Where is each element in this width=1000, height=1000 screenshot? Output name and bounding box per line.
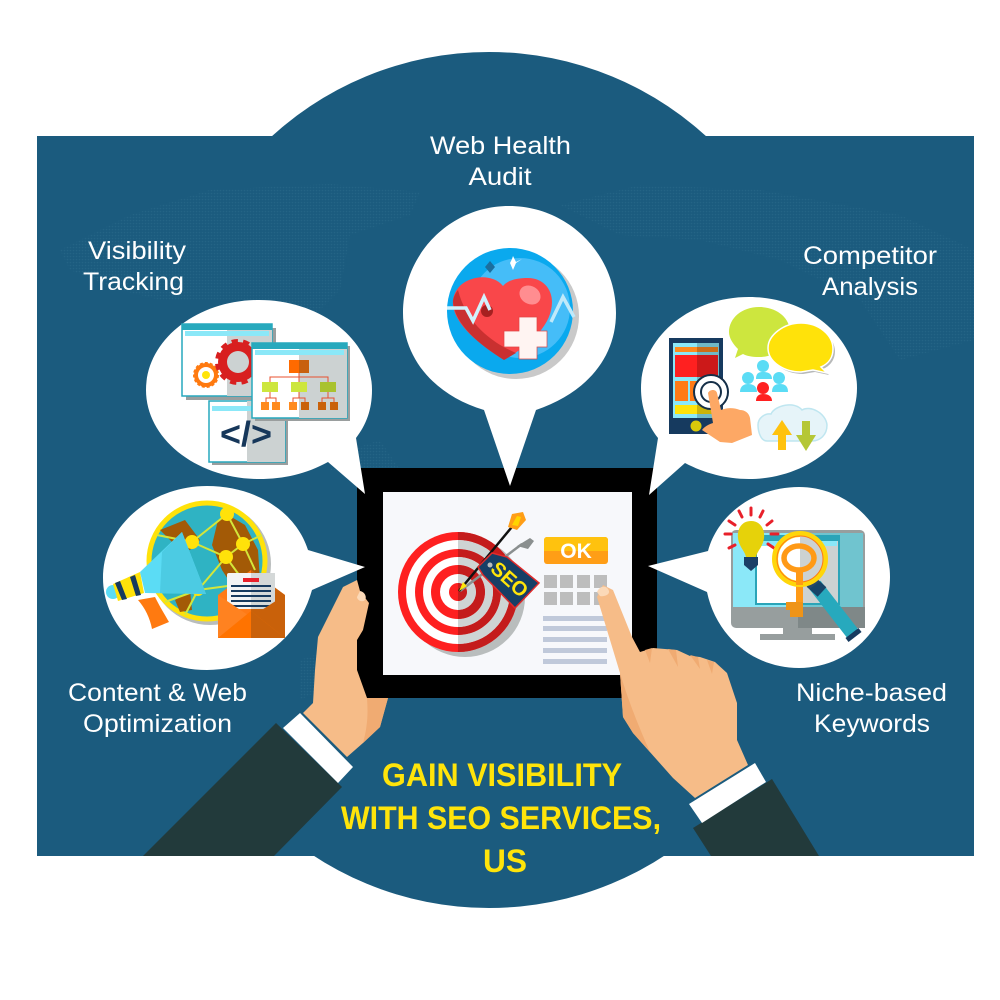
tablet body <box>357 468 657 698</box>
faint dotted world map <box>60 184 974 700</box>
speech bubble: competitor analysis <box>641 297 857 495</box>
label: competitor analysis: Competitor <box>803 242 937 270</box>
keypad squares <box>544 575 607 605</box>
left hand <box>303 580 388 757</box>
label: visibility tracking: Visibility <box>88 237 187 265</box>
window with code symbol <box>209 401 288 465</box>
key <box>786 570 803 617</box>
cloud with arrows <box>758 405 827 451</box>
title <box>341 757 661 879</box>
green speech balloon <box>729 307 790 358</box>
icon: niche keywords <box>725 508 865 640</box>
icon: heart health <box>447 248 579 379</box>
right shirt cuff <box>689 763 766 823</box>
people group <box>740 360 788 401</box>
yellow dart <box>459 512 526 591</box>
label: competitor analysis <box>803 242 937 301</box>
OK button: OK <box>560 540 592 563</box>
text lines on screen <box>543 616 607 664</box>
pointing hand <box>702 390 752 443</box>
monitor <box>731 530 865 640</box>
grey dart <box>460 538 534 591</box>
icon: competitor analysis <box>669 307 835 451</box>
SEO tag <box>478 553 539 608</box>
label: content and web optimization: Optimization <box>83 710 232 738</box>
speech bubble: visibility tracking <box>146 300 372 494</box>
label: content and web optimization: Content & Web <box>68 679 247 707</box>
light bulb <box>725 508 778 571</box>
label: niche-based keywords: Keywords <box>814 710 930 738</box>
title: US <box>483 843 527 879</box>
left hand holding tablet <box>143 580 388 856</box>
icon: visibility windows <box>182 324 350 465</box>
tablet <box>357 468 657 698</box>
label: niche-based keywords <box>796 679 947 738</box>
left suit sleeve <box>143 723 342 856</box>
label: web health audit: Web Health <box>430 132 571 160</box>
title: GAIN VISIBILITY <box>382 757 622 793</box>
SEO tag: SEO <box>486 558 532 602</box>
window with gears <box>182 324 276 400</box>
label: visibility tracking <box>83 237 187 296</box>
right hand shadow <box>620 648 714 752</box>
phone <box>669 338 723 434</box>
megaphone <box>106 532 206 629</box>
speech bubble: niche-based keywords <box>648 487 890 668</box>
right hand pointing <box>597 585 819 856</box>
speech bubble: web health audit <box>403 206 616 486</box>
window with hierarchy chart <box>252 343 350 421</box>
right suit sleeve <box>693 779 819 856</box>
envelope <box>218 570 285 638</box>
yellow speech balloon <box>768 323 835 375</box>
left hand shadow <box>363 698 388 743</box>
right fingernail <box>597 587 609 596</box>
label: web health audit <box>430 132 571 191</box>
globe network <box>149 503 271 625</box>
window with code symbol: </> <box>220 415 272 454</box>
label: niche-based keywords: Niche-based <box>796 679 947 707</box>
touch rings <box>694 375 728 409</box>
title: WITH SEO SERVICES, <box>341 800 661 836</box>
label: visibility tracking: Tracking <box>83 268 184 296</box>
right hand <box>597 585 748 798</box>
left shirt cuff <box>283 713 353 783</box>
label: web health audit: Audit <box>468 163 532 191</box>
magnifying glass <box>775 534 860 640</box>
left thumbnail <box>357 591 366 601</box>
label: content and web optimization <box>68 679 247 738</box>
label: competitor analysis: Analysis <box>822 273 918 301</box>
tablet screen <box>383 492 632 675</box>
icon: content and web optimization <box>106 503 285 638</box>
target icon <box>398 532 525 657</box>
speech bubble: content and web optimization <box>103 486 365 670</box>
OK button <box>544 537 608 564</box>
